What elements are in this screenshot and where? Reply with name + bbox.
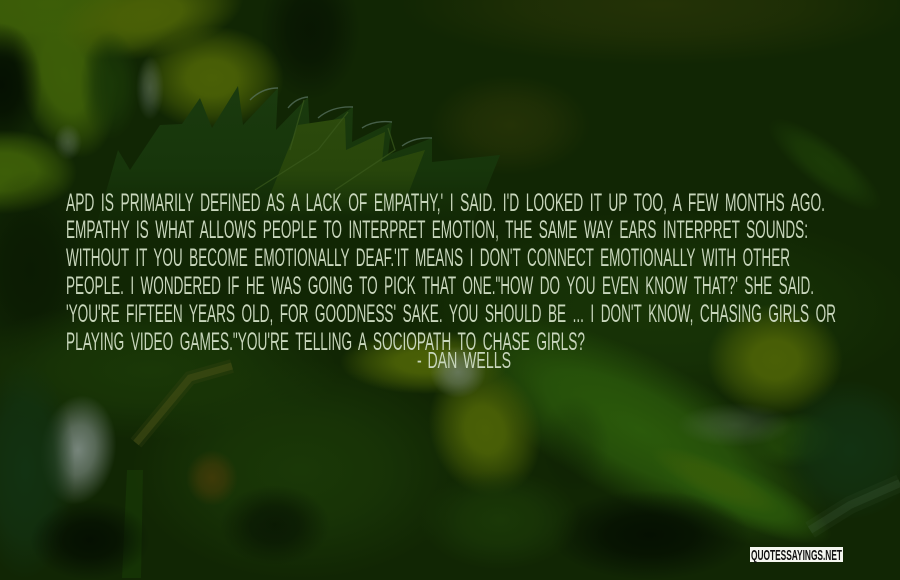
- quote text: [66, 189, 836, 356]
- attribution: - DAN WELLS: [417, 347, 511, 373]
- lower scene: [0, 300, 340, 440]
- watermark: [750, 547, 843, 564]
- nettle leaf: [95, 86, 500, 230]
